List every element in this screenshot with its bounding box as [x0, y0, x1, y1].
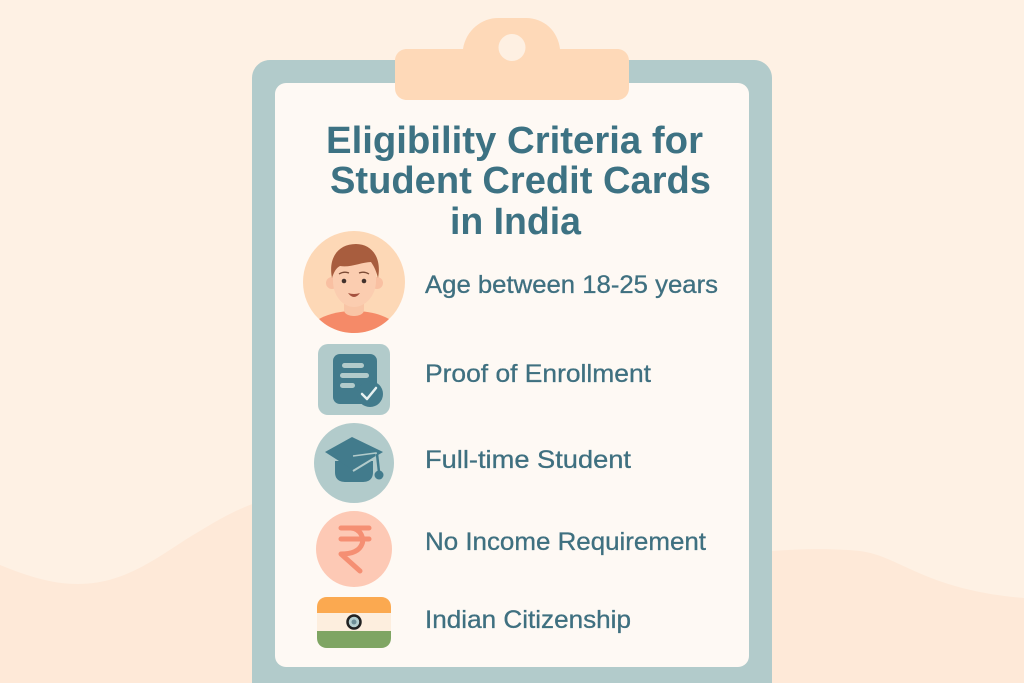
icon: rupee — [316, 511, 392, 587]
label: income: No Income Requirement — [425, 528, 706, 556]
label: full-time student: Full-time Student — [425, 446, 631, 474]
title — [326, 120, 711, 243]
label: citizenship: Indian Citizenship — [425, 606, 631, 634]
icon: graduation cap — [314, 423, 394, 503]
label: enrollment: Proof of Enrollment — [425, 360, 651, 388]
title: in India — [450, 201, 582, 243]
icon: student face — [303, 231, 405, 333]
paper sheet — [275, 83, 749, 667]
title: Student Credit Cards — [330, 160, 711, 202]
background wave — [0, 503, 1024, 683]
icon: India flag — [317, 597, 391, 648]
clipboard clip — [395, 18, 629, 100]
title: Eligibility Criteria for — [326, 120, 703, 162]
clipboard board — [252, 60, 772, 683]
label: age: Age between 18-25 years — [425, 271, 718, 299]
icon: enrollment document — [318, 344, 390, 415]
